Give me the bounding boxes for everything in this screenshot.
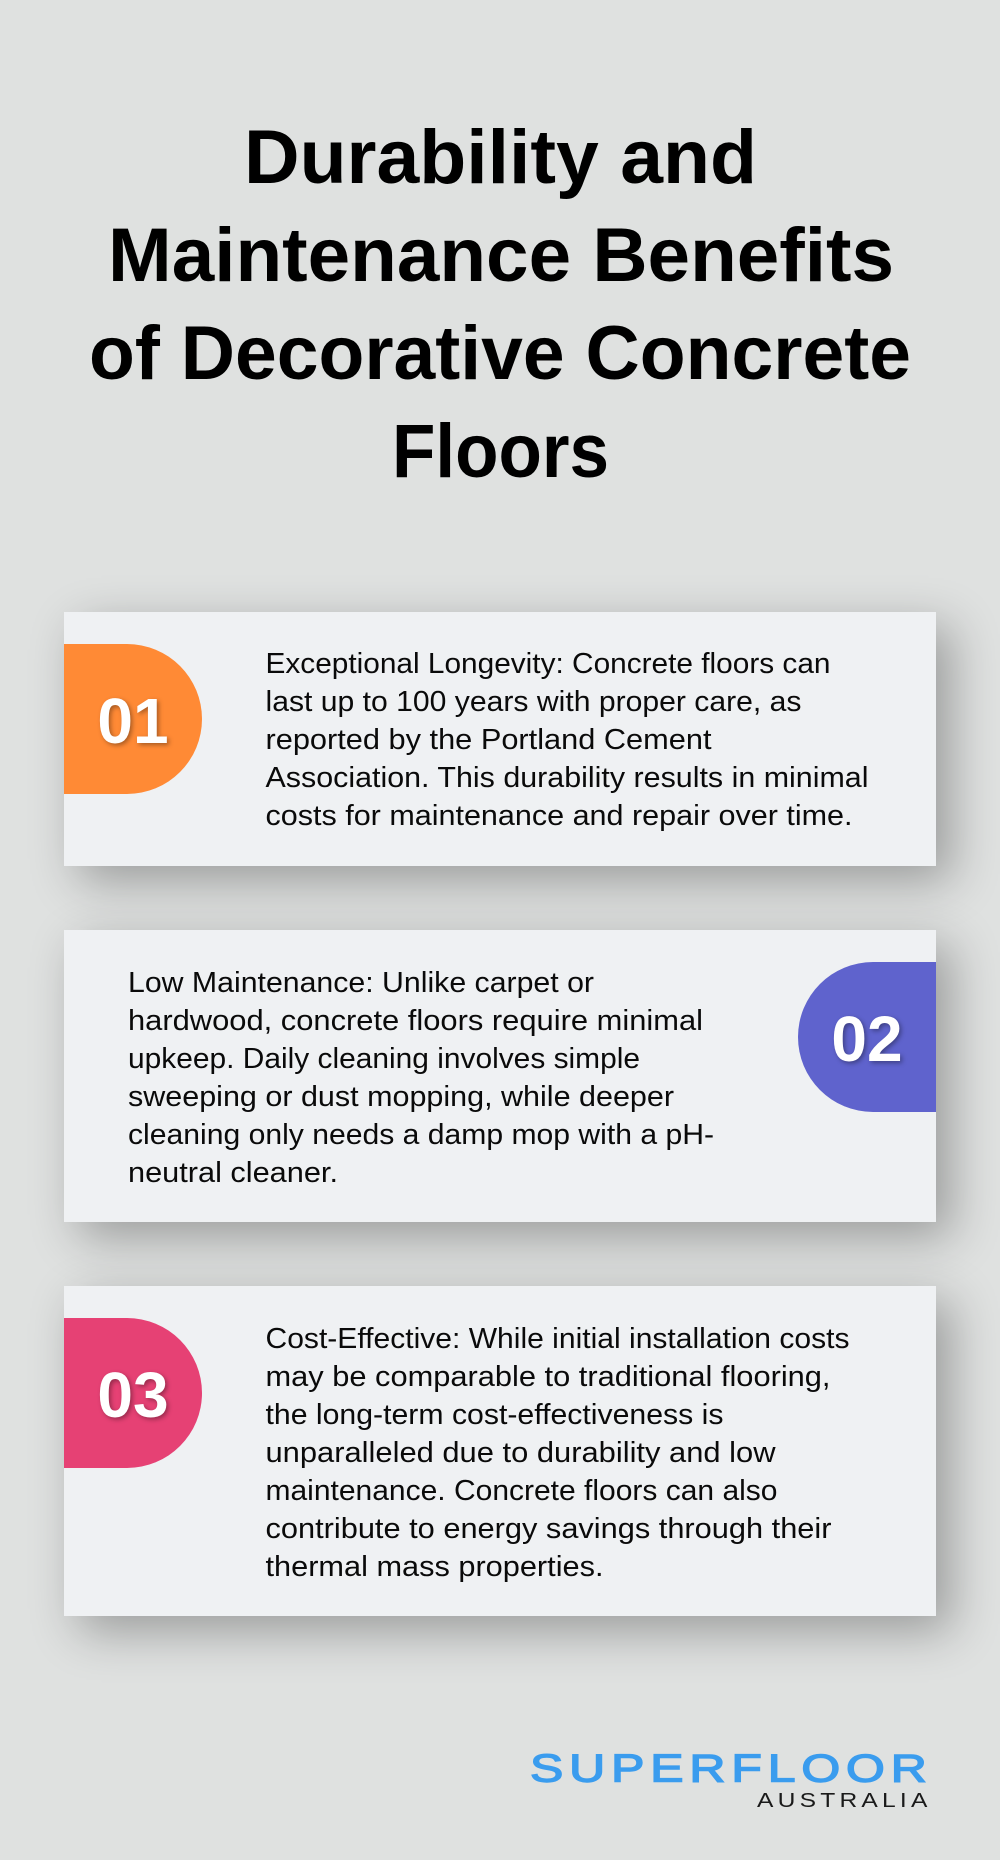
text block: exceptional longevity: costs for maintenance and repair over time. — [266, 800, 852, 832]
logo: Superfloor Australia: SUPERFLOOR — [530, 1747, 927, 1790]
logo: Superfloor Australia — [530, 1747, 928, 1812]
badge: 03 — [64, 1318, 202, 1468]
text block: exceptional longevity: Association. This durability results in minimal — [266, 762, 868, 794]
text block: cost-effective: thermal mass properties. — [266, 1551, 604, 1583]
text block: low maintenance: upkeep. Daily cleaning involves simple — [128, 1043, 640, 1075]
title: Floors — [392, 409, 609, 494]
title: Maintenance Benefits — [108, 213, 894, 298]
badge: 02 — [798, 962, 936, 1112]
badge: 03: 03 — [97, 1359, 169, 1431]
panel: card 03 cost-effective — [64, 1286, 936, 1616]
logo: Superfloor Australia: AUSTRALIA — [757, 1789, 928, 1812]
text block: exceptional longevity — [266, 648, 868, 832]
text block: cost-effective — [266, 1323, 849, 1583]
title — [89, 115, 911, 494]
text block: low maintenance: Low Maintenance: Unlike carpet or — [128, 967, 594, 999]
text block: cost-effective: may be comparable to traditional flooring, — [266, 1361, 830, 1393]
title: Durability and — [244, 115, 757, 200]
text block: low maintenance: hardwood, concrete floors require minimal — [128, 1005, 703, 1037]
text block: low maintenance: neutral cleaner. — [128, 1157, 338, 1189]
text block: exceptional longevity: Exceptional Longevity: Concrete floors can — [266, 648, 830, 680]
badge: 01: 01 — [97, 685, 169, 757]
title: of Decorative Concrete — [89, 311, 911, 396]
text block: exceptional longevity: reported by the Portland Cement — [266, 724, 712, 756]
panel: card 02 low maintenance — [64, 930, 936, 1222]
text block: cost-effective: unparalleled due to durability and low — [266, 1437, 777, 1469]
text block: cost-effective: Cost-Effective: While initial installation costs — [266, 1323, 849, 1355]
text block: cost-effective: maintenance. Concrete floors can also — [266, 1475, 778, 1507]
badge: 01 — [64, 644, 202, 794]
text block: low maintenance: sweeping or dust mopping, while deeper — [128, 1081, 674, 1113]
text block: cost-effective: contribute to energy savings through their — [266, 1513, 832, 1545]
text block: exceptional longevity: last up to 100 years with proper care, as — [266, 686, 802, 718]
text block: low maintenance: cleaning only needs a damp mop with a pH- — [128, 1119, 714, 1151]
panel: card 01 exceptional longevity — [64, 612, 936, 866]
text block: cost-effective: the long-term cost-effectiveness is — [266, 1399, 724, 1431]
text block: low maintenance — [128, 967, 714, 1189]
badge: 02: 02 — [831, 1003, 903, 1075]
